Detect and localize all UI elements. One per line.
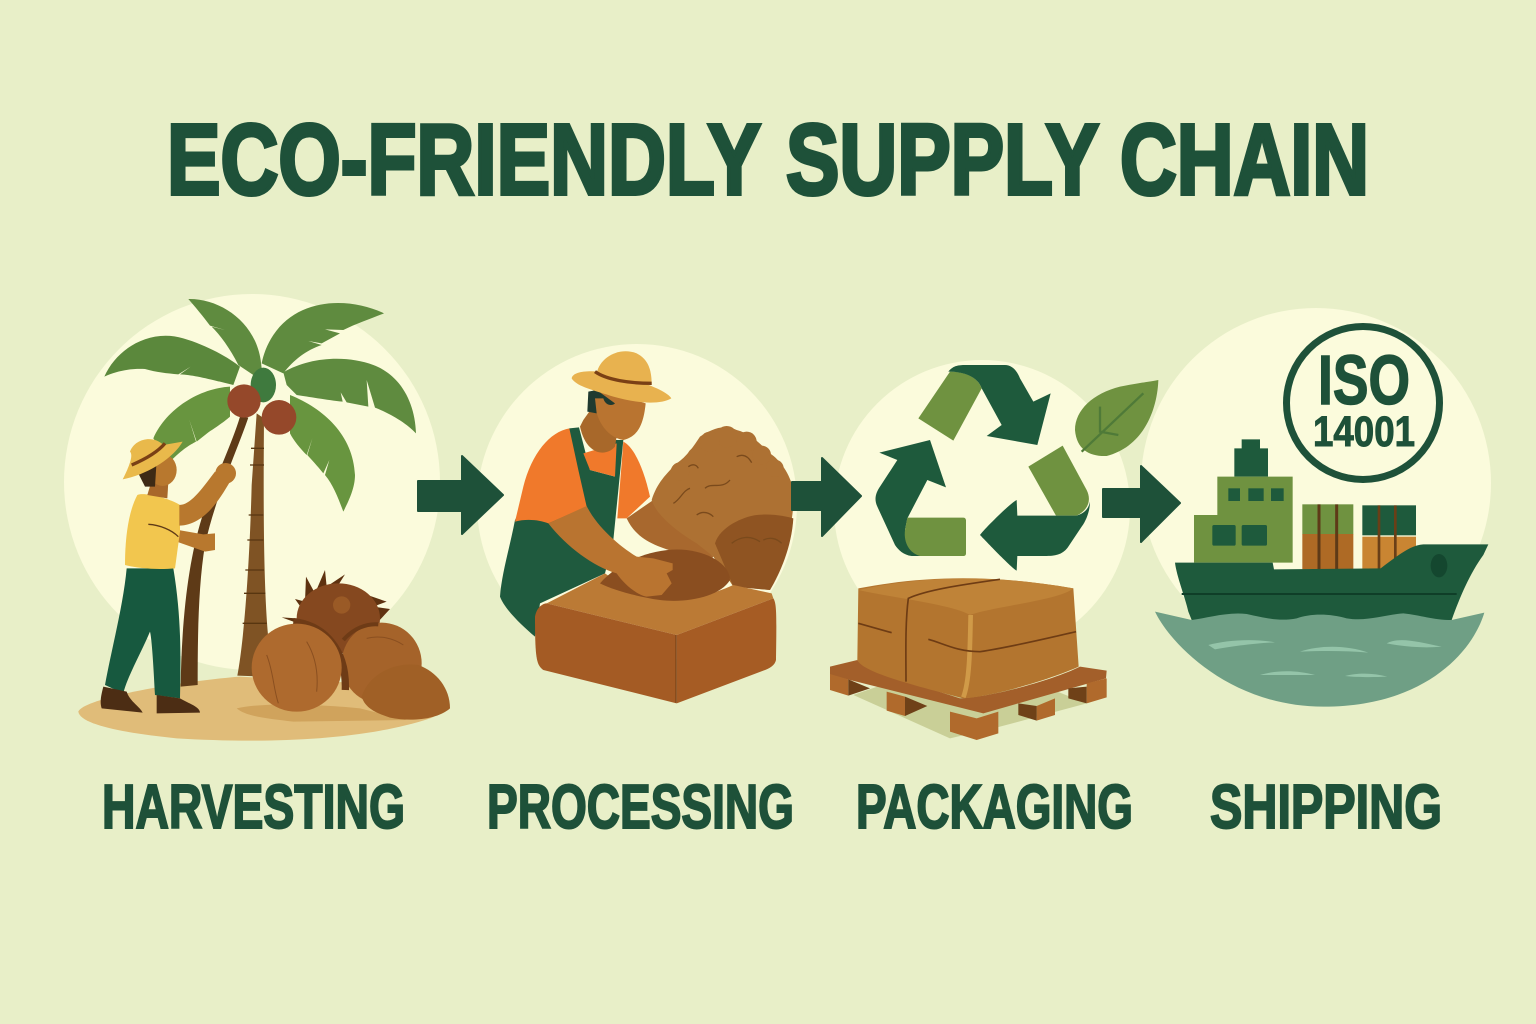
label: processing: PROCESSING <box>487 773 794 842</box>
ISO badge <box>1286 326 1440 480</box>
palm tree <box>104 299 416 687</box>
pallet <box>830 660 1107 740</box>
panel: packaging <box>830 360 1158 740</box>
background circle <box>477 344 797 664</box>
coir block <box>535 549 776 703</box>
icon: leaf <box>1075 380 1158 456</box>
label: harvesting: HARVESTING <box>102 773 405 842</box>
background circle <box>1141 308 1491 658</box>
title: SUPPLY <box>786 104 1099 216</box>
worker <box>500 351 713 637</box>
coconut pile <box>252 570 450 720</box>
ISO badge: 14001 <box>1313 408 1415 456</box>
background circle <box>64 294 440 670</box>
arrow 1 <box>418 456 503 534</box>
label: shipping: SHIPPING <box>1210 773 1442 842</box>
ISO badge: ISO <box>1318 341 1410 419</box>
title <box>167 104 1369 216</box>
arrow 2 <box>792 458 861 536</box>
cardboard box <box>857 578 1079 698</box>
ground <box>78 677 437 741</box>
label: packaging: PACKAGING <box>856 773 1133 842</box>
title: ECO-FRIENDLY <box>167 104 761 216</box>
coir mound <box>652 426 794 590</box>
farmer <box>101 439 236 713</box>
panel: shipping <box>1141 308 1491 707</box>
water <box>1155 612 1484 707</box>
arm and hand <box>548 506 673 597</box>
panel: processing <box>477 344 797 703</box>
panel: harvesting <box>64 294 450 741</box>
arrow 3 <box>1103 466 1180 542</box>
title: CHAIN <box>1120 104 1369 216</box>
recycling symbol <box>876 365 1090 571</box>
background circle <box>834 360 1130 656</box>
ship <box>1175 439 1488 620</box>
